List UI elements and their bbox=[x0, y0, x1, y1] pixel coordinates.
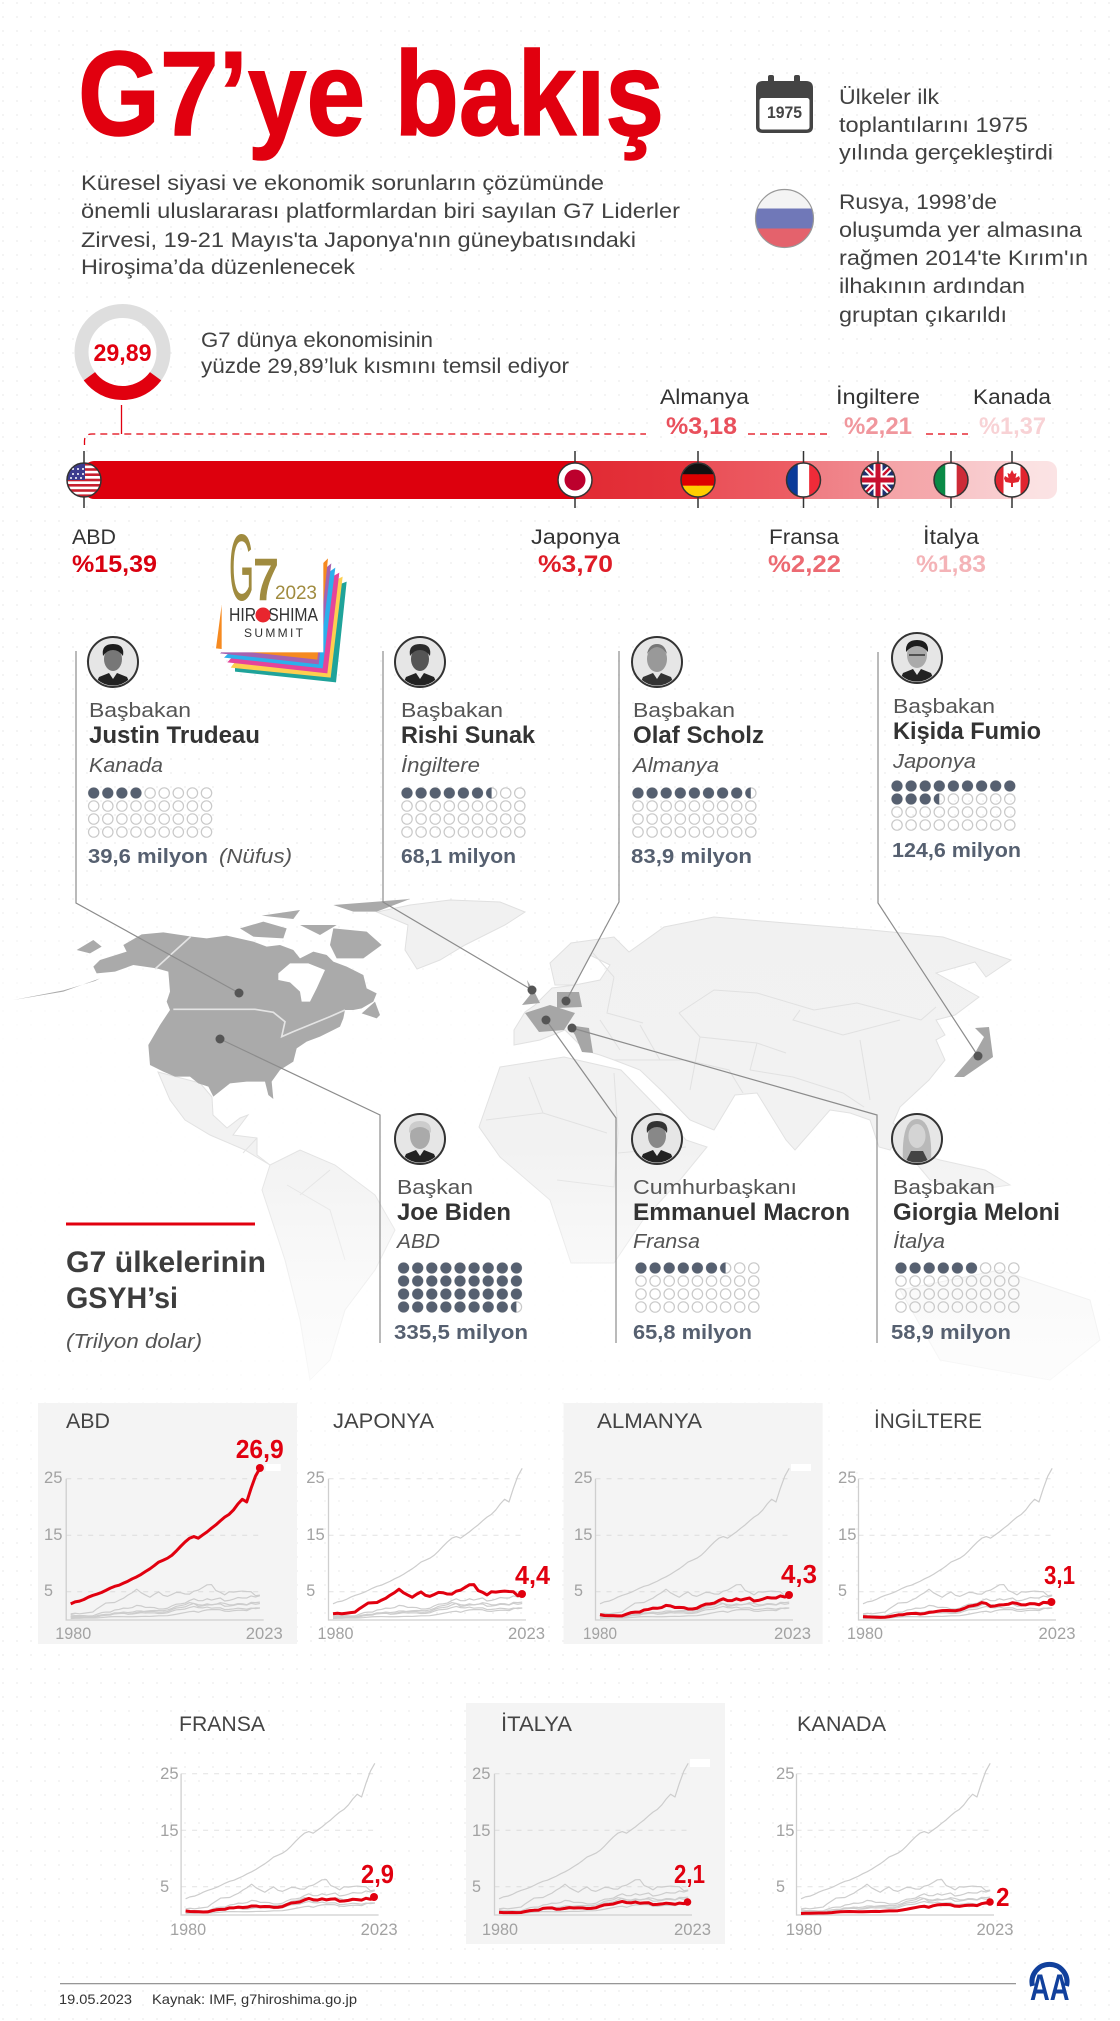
gdp section heading: (Trilyon dolar) bbox=[66, 1331, 202, 1353]
upper country labels: Kanada bbox=[973, 386, 1051, 409]
intro paragraph bbox=[81, 171, 680, 279]
line chart: kanada: KANADA bbox=[797, 1713, 886, 1736]
map: g7 europe and japan highlighted bbox=[522, 980, 993, 1077]
line chart: japonya: 2023 bbox=[508, 1624, 545, 1643]
line chart: ingiltere: 15 bbox=[838, 1525, 856, 1544]
panel: biden bbox=[394, 1114, 528, 1344]
portrait: meloni bbox=[892, 1114, 942, 1164]
line chart: kanada: 15 bbox=[776, 1821, 794, 1840]
upper country labels: İngiltere bbox=[836, 386, 920, 409]
note: first meeting: toplantılarını 1975 bbox=[839, 113, 1028, 137]
line chart: ingiltere: 5 bbox=[838, 1581, 847, 1600]
line chart: japonya bbox=[306, 1410, 551, 1643]
panel: macron: Emmanuel Macron bbox=[633, 1199, 850, 1226]
icon: calendar 1975: 1975 bbox=[767, 103, 802, 122]
donut chart: 29,89: 29,89 bbox=[94, 340, 152, 367]
line chart: kanada: 2023 bbox=[976, 1920, 1014, 1939]
gdp section heading: GSYH’si bbox=[66, 1282, 178, 1315]
panel: kishida bbox=[892, 633, 1041, 862]
g7 hiroshima logo: 7 bbox=[253, 546, 279, 613]
world map bbox=[13, 899, 1100, 1380]
panel: sunak bbox=[395, 637, 536, 868]
note: russia bbox=[839, 190, 1088, 327]
gdp section heading bbox=[66, 1222, 266, 1353]
flags row bbox=[67, 451, 1029, 508]
intro paragraph: Zirvesi, 19-21 Mayıs'ta Japonya'nın güneybatısındaki bbox=[81, 228, 636, 252]
line chart: abd: 15 bbox=[44, 1525, 62, 1544]
donut chart: 29,89 bbox=[82, 311, 164, 393]
panel: biden: ABD bbox=[396, 1231, 440, 1253]
line chart: japonya: 15 bbox=[306, 1525, 325, 1544]
intro paragraph: Küresel siyasi ve ekonomik sorunların çözümünde bbox=[81, 171, 604, 195]
panel: sunak: Başbakan bbox=[401, 700, 503, 722]
line chart: ingiltere: 1980 bbox=[847, 1624, 883, 1643]
note: first meeting bbox=[839, 85, 1053, 164]
portrait: biden bbox=[395, 1114, 445, 1164]
line chart: fransa: FRANSA bbox=[179, 1713, 265, 1736]
panel: meloni: Giorgia Meloni bbox=[893, 1199, 1060, 1226]
line chart: ingiltere bbox=[838, 1410, 1076, 1643]
line chart: fransa: 25 bbox=[160, 1764, 179, 1783]
lower country labels: %15,39 bbox=[72, 551, 157, 578]
gdp section heading: G7 ülkelerinin bbox=[66, 1246, 266, 1279]
line chart: almanya: ALMANYA bbox=[597, 1410, 702, 1433]
panel: sunak: Rishi Sunak bbox=[401, 722, 536, 749]
intro paragraph: önemli uluslararası platformlardan biri sayılan G7 Liderler bbox=[81, 199, 680, 223]
panel: biden: Joe Biden bbox=[397, 1199, 511, 1226]
line chart: abd: 2023 bbox=[246, 1624, 283, 1643]
intro paragraph: Hiroşima’da düzenlenecek bbox=[81, 255, 355, 279]
line chart: abd: 26,9 bbox=[236, 1434, 284, 1464]
title: G7’ye bakış bbox=[78, 27, 664, 161]
panel: meloni bbox=[891, 1114, 1060, 1344]
line chart: abd: 25 bbox=[44, 1468, 62, 1487]
panel: trudeau: 39,6 milyon bbox=[88, 846, 208, 868]
lower country labels: Fransa bbox=[769, 526, 839, 549]
note: russia: ilhakının ardından bbox=[839, 274, 1025, 298]
icon: uk flag bbox=[861, 463, 895, 497]
line chart: italya: 25 bbox=[472, 1764, 490, 1783]
line chart: abd bbox=[38, 1403, 297, 1644]
note: first meeting: yılında gerçekleştirdi bbox=[839, 140, 1053, 164]
line chart: kanada: 5 bbox=[776, 1877, 785, 1896]
panel: kishida: 124,6 milyon bbox=[892, 840, 1021, 862]
g7 hiroshima logo: HIROSHIMA bbox=[229, 605, 318, 625]
line chart: fransa: 15 bbox=[160, 1821, 179, 1840]
icon: anadolu agency logo: AA bbox=[1030, 1967, 1070, 2008]
upper country labels: Almanya bbox=[660, 386, 749, 409]
portrait: macron bbox=[632, 1114, 682, 1164]
portrait: sunak bbox=[395, 637, 445, 687]
lower country labels: Japonya bbox=[531, 526, 620, 549]
g7 hiroshima logo: G bbox=[229, 515, 254, 621]
upper country labels: %2,21 bbox=[844, 413, 912, 440]
lower country labels: ABD bbox=[72, 526, 116, 549]
line chart: japonya: 25 bbox=[306, 1468, 325, 1487]
panel: trudeau: (Nüfus) bbox=[219, 846, 292, 868]
footer source: Kaynak: IMF, g7hiroshima.go.jp bbox=[152, 1991, 357, 2007]
panel: scholz bbox=[631, 637, 764, 868]
line chart: fransa: 2023 bbox=[361, 1920, 398, 1939]
icon: usa flag bbox=[67, 463, 101, 497]
line chart: almanya: 25 bbox=[574, 1468, 592, 1487]
lower country labels: %3,70 bbox=[538, 551, 613, 578]
panel: scholz: 83,9 milyon bbox=[631, 846, 752, 868]
note: russia: gruptan çıkarıldı bbox=[839, 303, 1007, 327]
line chart: japonya: JAPONYA bbox=[333, 1410, 434, 1433]
line chart: italya: 5 bbox=[472, 1877, 481, 1896]
line chart: kanada: 25 bbox=[776, 1764, 794, 1783]
line chart: italya: 1980 bbox=[482, 1920, 518, 1939]
upper country labels: %1,37 bbox=[979, 413, 1046, 440]
icon: germany flag bbox=[681, 463, 715, 497]
line chart: ingiltere: 25 bbox=[838, 1468, 856, 1487]
donut caption bbox=[201, 328, 569, 378]
panel: biden: Başkan bbox=[397, 1177, 473, 1199]
panel: kishida: Kişida Fumio bbox=[893, 718, 1041, 745]
panel: sunak: 68,1 milyon bbox=[401, 846, 516, 868]
lower country labels bbox=[72, 526, 986, 578]
panel: macron bbox=[632, 1114, 850, 1344]
note: russia: rağmen 2014'te Kırım'ın bbox=[839, 246, 1088, 270]
icon: france flag bbox=[786, 463, 821, 497]
footer rule bbox=[60, 1983, 1016, 1985]
icon: calendar 1975 bbox=[756, 75, 813, 133]
portrait: scholz bbox=[632, 637, 682, 687]
g7 hiroshima logo: 2023 bbox=[275, 583, 317, 604]
line chart: almanya: 15 bbox=[574, 1525, 592, 1544]
panel: scholz: Almanya bbox=[632, 755, 719, 777]
portrait: trudeau bbox=[88, 637, 138, 687]
line chart: almanya: 5 bbox=[574, 1581, 583, 1600]
panel: trudeau bbox=[88, 637, 292, 868]
upper country labels: %3,18 bbox=[666, 413, 737, 440]
map: north america highlighted bbox=[13, 899, 410, 1099]
line chart: kanada: 1980 bbox=[786, 1920, 822, 1939]
line chart: fransa bbox=[160, 1713, 398, 1939]
line chart: almanya bbox=[564, 1403, 823, 1644]
line chart: almanya: 4,3 bbox=[781, 1559, 817, 1589]
note: first meeting: Ülkeler ilk bbox=[839, 85, 939, 109]
panel: scholz: Olaf Scholz bbox=[633, 722, 764, 749]
donut caption: G7 dünya ekonomisinin bbox=[201, 328, 433, 352]
line chart: abd: 5 bbox=[44, 1581, 53, 1600]
lower country labels: %2,22 bbox=[768, 551, 841, 578]
upper country labels bbox=[660, 386, 1051, 440]
line chart: kanada: 2 bbox=[996, 1882, 1010, 1912]
panel: scholz: Başbakan bbox=[633, 700, 735, 722]
icon: italy flag bbox=[934, 463, 968, 497]
line chart: almanya: 1980 bbox=[583, 1624, 617, 1643]
icon: canada flag bbox=[995, 463, 1029, 497]
panel: trudeau: Justin Trudeau bbox=[89, 722, 260, 749]
note: russia: Rusya, 1998’de bbox=[839, 190, 997, 214]
icon: japan flag bbox=[558, 463, 592, 497]
share bar bbox=[84, 461, 1057, 499]
footer source: 19.05.2023 bbox=[59, 1991, 132, 2007]
line chart: italya: İTALYA bbox=[501, 1713, 572, 1736]
line chart: ingiltere: İNGİLTERE bbox=[874, 1410, 982, 1433]
footer source bbox=[59, 1991, 357, 2007]
line chart: almanya: 2023 bbox=[774, 1624, 811, 1643]
panel: biden: 335,5 milyon bbox=[394, 1322, 528, 1344]
line chart: japonya: 1980 bbox=[318, 1624, 354, 1643]
g7 hiroshima logo bbox=[216, 515, 347, 682]
donut caption: yüzde 29,89’luk kısmını temsil ediyor bbox=[201, 354, 569, 378]
panel: sunak: İngiltere bbox=[401, 755, 480, 777]
line chart: italya bbox=[466, 1703, 725, 1944]
map: greenland bbox=[377, 900, 525, 969]
line chart: italya: 2023 bbox=[674, 1920, 711, 1939]
line chart: italya: 15 bbox=[472, 1821, 490, 1840]
line chart: fransa: 1980 bbox=[170, 1920, 206, 1939]
panel: trudeau: Kanada bbox=[89, 755, 163, 777]
panel: trudeau: Başbakan bbox=[89, 700, 191, 722]
line chart: japonya: 5 bbox=[306, 1581, 315, 1600]
line chart: fransa: 2,9 bbox=[361, 1859, 394, 1889]
panel: meloni: Başbakan bbox=[893, 1177, 995, 1199]
portrait: kishida bbox=[892, 633, 942, 683]
line chart: abd: 1980 bbox=[55, 1624, 91, 1643]
lower country labels: %1,83 bbox=[916, 551, 986, 578]
leader lines and markers bbox=[76, 651, 982, 1343]
panel: macron: Fransa bbox=[633, 1231, 700, 1253]
panel: meloni: 58,9 milyon bbox=[891, 1322, 1011, 1344]
lower country labels: İtalya bbox=[923, 526, 979, 549]
panel: macron: Cumhurbaşkanı bbox=[633, 1177, 797, 1199]
line chart: ingiltere: 3,1 bbox=[1044, 1560, 1075, 1590]
panel: kishida: Japonya bbox=[892, 751, 976, 773]
line chart: abd: ABD bbox=[66, 1410, 110, 1433]
line chart: ingiltere: 2023 bbox=[1038, 1624, 1076, 1643]
note: russia: oluşumda yer almasına bbox=[839, 218, 1082, 242]
line chart: japonya: 4,4 bbox=[515, 1560, 551, 1590]
icon: russia flag bbox=[755, 189, 815, 248]
line chart: kanada bbox=[776, 1713, 1014, 1939]
line chart: fransa: 5 bbox=[160, 1877, 169, 1896]
panel: meloni: İtalya bbox=[893, 1231, 945, 1253]
dashed bracket connector bbox=[84, 405, 968, 445]
panel: kishida: Başbakan bbox=[893, 696, 995, 718]
g7 hiroshima logo: SUMMIT bbox=[244, 626, 304, 640]
line chart: italya: 2,1 bbox=[674, 1859, 705, 1889]
panel: macron: 65,8 milyon bbox=[633, 1322, 752, 1344]
